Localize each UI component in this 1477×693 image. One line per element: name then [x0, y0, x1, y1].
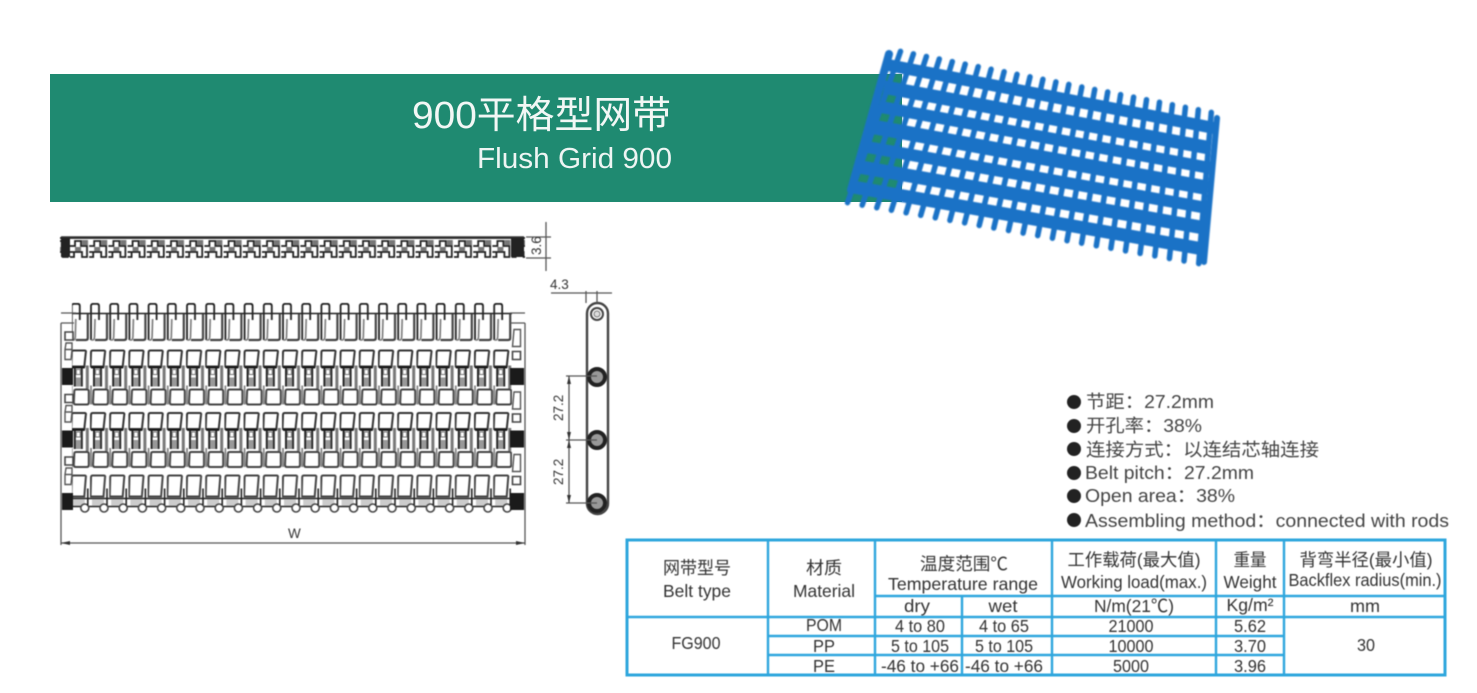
- specification list: Belt pitch：27.2mm: [1085, 463, 1254, 483]
- dimension: 4.3: [550, 277, 612, 303]
- column: backflex radius: 背弯半径(最小值): [1300, 550, 1432, 570]
- column: working load: [1061, 550, 1207, 676]
- hinge pins: [589, 308, 605, 511]
- left end of edge view: [61, 238, 70, 257]
- column: weight: 3.96: [1234, 656, 1266, 676]
- title text: [412, 95, 672, 175]
- dimension: 27.2 pitch: 27.2: [551, 459, 566, 485]
- column: backflex radius: [1288, 550, 1442, 655]
- side view drawing: [550, 277, 612, 514]
- column: temperature range: 5 to 105: [891, 636, 949, 656]
- column: backflex radius: mm: [1350, 596, 1380, 616]
- specification table: [627, 540, 1445, 676]
- column: temperature range: -46 to +66: [881, 656, 959, 676]
- column: working load: 工作载荷(最大值): [1068, 550, 1200, 570]
- top fingers row: [72, 303, 512, 350]
- column: material: 材质: [806, 558, 842, 578]
- column: working load: Working load(max.): [1061, 572, 1207, 592]
- column: temperature range: Temperature range: [888, 574, 1038, 594]
- column: belt type: 网带型号: [663, 558, 731, 578]
- column: belt type: FG900: [672, 633, 721, 653]
- column: temperature range: [881, 554, 1043, 676]
- link rows: [72, 350, 512, 474]
- column: weight: Kg/m²: [1226, 595, 1274, 615]
- column: material: PE: [813, 656, 835, 676]
- table grid: [627, 540, 1445, 675]
- specification list: 连接方式：以连结芯轴连接: [1086, 440, 1319, 460]
- column: weight: 3.70: [1234, 636, 1266, 656]
- column: belt type: Belt type: [663, 581, 731, 601]
- belt plan view drawing: [60, 303, 525, 545]
- column: temperature range: 4 to 65: [979, 616, 1029, 636]
- column: material: Material: [793, 581, 855, 601]
- specification list: 开孔率：38%: [1086, 416, 1202, 436]
- column: working load: 5000: [1113, 656, 1149, 676]
- column: backflex radius: 30: [1357, 635, 1375, 655]
- column: working load: 21000: [1108, 616, 1154, 636]
- title text: Flush Grid 900: [477, 143, 672, 175]
- title banner: [50, 74, 902, 202]
- column: temperature range: 5 to 105: [975, 636, 1033, 656]
- dimension: 27.2 pitch: [551, 376, 597, 503]
- column: material: [793, 558, 855, 676]
- column: temperature range: -46 to +66: [965, 656, 1043, 676]
- column: material: PP: [813, 636, 835, 656]
- specification list: [1067, 392, 1449, 531]
- dimension: 3.6: 3.6: [529, 236, 544, 255]
- dimension: W: [61, 526, 525, 545]
- title text: 900平格型网带: [412, 95, 671, 137]
- specification list: Assembling method：connected with rods: [1085, 511, 1449, 531]
- column: working load: 10000: [1108, 636, 1154, 656]
- left end caps: [60, 326, 75, 516]
- right end caps: [510, 326, 525, 516]
- front edge view drawing: [60, 222, 551, 271]
- right end of edge view: [511, 238, 524, 257]
- column: material: POM: [806, 615, 842, 635]
- specification list: 节距：27.2mm: [1086, 392, 1214, 412]
- column: temperature range: wet: [987, 596, 1018, 616]
- column: weight: [1224, 550, 1277, 676]
- column: temperature range: 温度范围℃: [920, 554, 1008, 574]
- product photo: blue flush grid belt: [848, 51, 1217, 264]
- column: temperature range: 4 to 80: [895, 616, 945, 636]
- dimension: 27.2 pitch: 27.2: [551, 395, 566, 421]
- column: backflex radius: Backflex radius(min.): [1288, 570, 1442, 590]
- column: temperature range: dry: [904, 596, 930, 616]
- column: weight: Weight: [1224, 572, 1277, 592]
- column: working load: N/m(21℃): [1094, 596, 1174, 616]
- specification list: Open area：38%: [1085, 486, 1235, 506]
- dimension: 4.3: 4.3: [550, 277, 569, 292]
- column: belt type: [663, 558, 731, 653]
- dimension: 3.6: [526, 222, 551, 271]
- column: weight: 5.62: [1234, 616, 1266, 636]
- bottom row: [72, 474, 512, 518]
- column: weight: 重量: [1234, 550, 1266, 570]
- dimension: W: W: [288, 526, 301, 541]
